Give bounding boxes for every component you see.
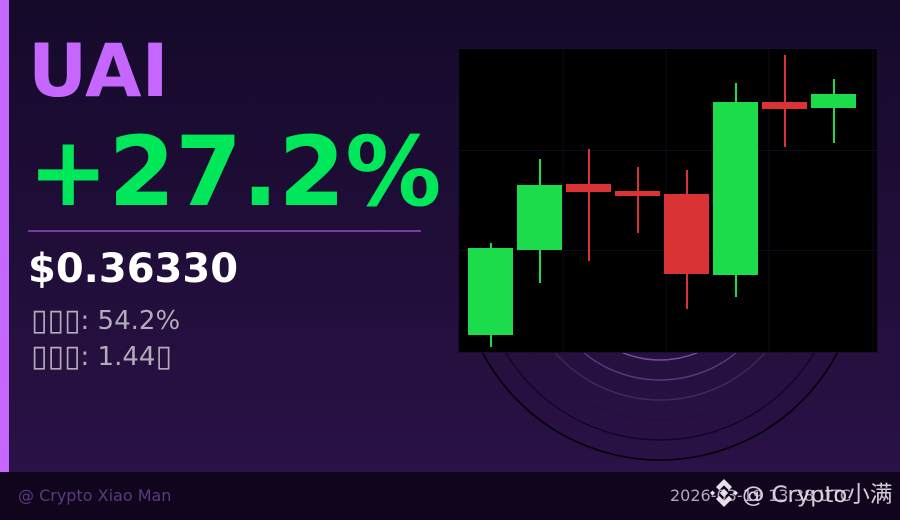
price: $0.36330 [28,246,238,292]
accent bar [0,0,9,472]
candle 2 [517,159,562,283]
footer date: 2026-03-19 13:38 UTC [670,486,851,505]
footer credit: @ Crypto Xiao Man [18,486,171,505]
stat: first metric: ▯▯▯: 54.2% [31,303,180,338]
candle 1 [468,243,513,347]
candle 8 [811,79,856,143]
candle 5 [664,170,709,309]
percentage change: +27.2% [28,116,441,228]
token symbol: UAI [28,29,169,114]
candle 6 [713,83,758,297]
candle 7 [762,55,807,147]
icon: binance logo [710,479,738,507]
candle 4 [615,167,660,233]
footer bar [0,472,900,520]
candlestick chart [458,49,878,353]
candle 3 [566,149,611,261]
divider [28,230,421,232]
stat: second metric: ▯▯▯: 1.44▯ [31,339,172,374]
watermark: @ Crypto小满 [742,482,892,508]
